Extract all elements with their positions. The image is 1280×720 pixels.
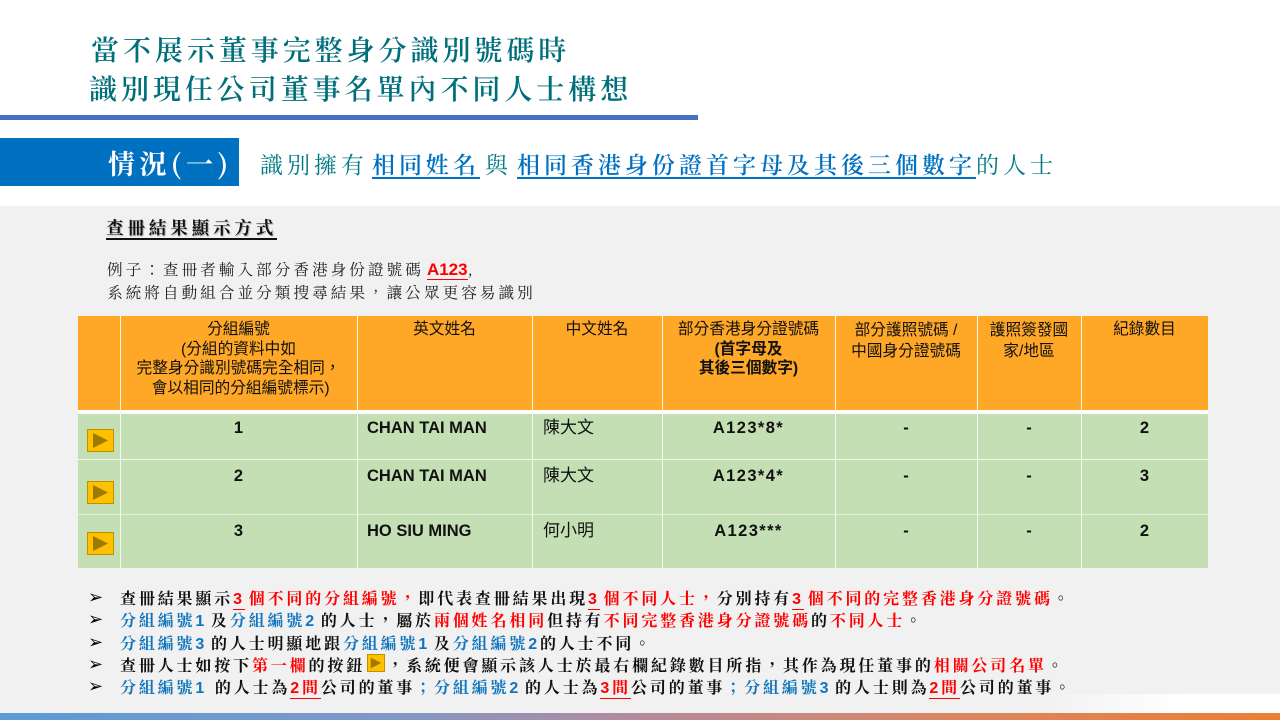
finding 1: 3 bbox=[588, 591, 600, 608]
finding 1: 查冊結果顯示 個不同的分組編號，即代表查冊結果出現 個不同人士，分別持有 個不同的完整香港身分證號碼。 bbox=[120, 586, 1072, 609]
column heading: passport issuing place: 家/地區 bbox=[1003, 343, 1055, 360]
column heading: English name: 英文姓名 bbox=[413, 321, 476, 338]
table row 3: HO SIU MING bbox=[367, 522, 472, 540]
table row 2: - bbox=[903, 467, 909, 485]
finding 5: 2間 bbox=[290, 675, 321, 698]
finding 1: 3 bbox=[792, 591, 804, 608]
finding 4: 查冊人士如按下第一欄的按鈕 ，系統便會顯示該人士於最右欄紀錄數目所指，其作為現任董事的相關公司名單。 bbox=[120, 653, 1066, 676]
column heading: group number: 分組編號 bbox=[207, 321, 270, 338]
column heading: partial passport: 部分護照號碼 / bbox=[855, 322, 957, 339]
section label: scenario one bbox=[0, 138, 239, 186]
table row 2: A123*4* bbox=[713, 467, 784, 485]
column heading: Chinese name: 中文姓名 bbox=[566, 321, 628, 338]
finding 3: 分組編號3 的人士明顯地跟分組編號1 及分組編號2的人士不同。 bbox=[120, 631, 653, 654]
column heading: partial HKID: 其後三個數字) bbox=[699, 360, 798, 377]
finding 3: ➢ bbox=[88, 632, 103, 653]
table row 1: - bbox=[1026, 419, 1032, 437]
row 1 button icon bbox=[87, 429, 114, 452]
finding 2: ➢ bbox=[88, 609, 103, 630]
section subheading: 相同姓名 bbox=[372, 147, 480, 180]
finding 2: 分組編號1 及分組編號2 的人士，屬於兩個姓名相同但持有不同完整香港身分證號碼的不同人士。 bbox=[120, 608, 924, 631]
column heading: group number: 完整身分識別號碼完全相同， bbox=[137, 360, 340, 377]
column heading: partial passport: 中國身分證號碼 bbox=[851, 343, 961, 360]
table header row bbox=[78, 316, 1208, 410]
column heading: partial passport bbox=[851, 321, 961, 360]
finding 1: 3 bbox=[233, 591, 245, 608]
example text bbox=[107, 258, 536, 303]
table row 2: CHAN TAI MAN bbox=[367, 467, 487, 485]
table row 3: 2 bbox=[1140, 522, 1149, 540]
row 3 button icon bbox=[87, 532, 114, 555]
table row 1: CHAN TAI MAN bbox=[367, 419, 487, 437]
section subheading: 識別擁有 與 的人士 bbox=[260, 147, 1057, 180]
row 2 button icon bbox=[87, 481, 114, 504]
table row 3: A123*** bbox=[714, 522, 783, 540]
white separator band bbox=[78, 410, 1208, 414]
column heading: record count: 紀錄數目 bbox=[1113, 321, 1176, 338]
table row 1: 2 bbox=[1140, 419, 1149, 437]
table row 2: 2 bbox=[234, 467, 243, 485]
column heading: group number: (分組的資料中如 bbox=[181, 340, 296, 358]
fade patch lower right bbox=[1040, 694, 1280, 713]
table row 1 bbox=[78, 414, 1208, 459]
footer gradient bar bbox=[0, 713, 1280, 720]
example text: 系統將自動組合並分類搜尋結果，讓公眾更容易識別 bbox=[107, 281, 536, 303]
example text: 例子：查冊者輸入部分香港身份證號碼 , bbox=[107, 258, 476, 280]
column heading: partial HKID: (首字母及 bbox=[714, 340, 782, 358]
results table bbox=[78, 316, 1208, 568]
finding 1: ➢ bbox=[88, 587, 103, 608]
panel heading: 查冊結果顯示方式 bbox=[106, 215, 277, 240]
title: 識別現任公司董事名單內不同人士構想 bbox=[89, 68, 632, 108]
table row 2: - bbox=[1026, 467, 1032, 485]
column heading: passport issuing place: 護照簽發國 bbox=[990, 322, 1068, 339]
finding 5: ➢ bbox=[88, 676, 103, 697]
column heading: passport issuing place bbox=[990, 321, 1068, 360]
column heading: partial HKID bbox=[678, 320, 819, 377]
table row 2: 3 bbox=[1140, 467, 1149, 485]
example text: A123 bbox=[427, 260, 468, 279]
section label: scenario one: 情況(一) bbox=[108, 143, 233, 182]
title: 當不展示董事完整身分識別號碼時 bbox=[91, 29, 570, 69]
column heading: group number bbox=[137, 320, 340, 396]
table row 3: - bbox=[1026, 522, 1032, 540]
column heading: group number: 會以相同的分組編號標示) bbox=[152, 380, 330, 396]
title underline bar bbox=[0, 115, 698, 120]
table row 2: 陳大文 bbox=[543, 466, 594, 485]
inline button icon bbox=[367, 654, 385, 672]
finding 5: 3間 bbox=[600, 675, 631, 698]
table row 1: - bbox=[903, 419, 909, 437]
grey content panel bbox=[0, 206, 1280, 713]
table row 3: - bbox=[903, 522, 909, 540]
table row 3 bbox=[78, 515, 1208, 568]
section subheading: 相同香港身份證首字母及其後三個數字 bbox=[517, 147, 976, 180]
finding 4: ➢ bbox=[88, 654, 103, 675]
table row 1: 1 bbox=[234, 419, 243, 437]
table row 3: 何小明 bbox=[543, 521, 594, 540]
title bbox=[89, 29, 632, 108]
finding 5: 2間 bbox=[929, 675, 960, 698]
table row 1: A123*8* bbox=[713, 419, 784, 437]
table row 2 bbox=[78, 460, 1208, 514]
findings list bbox=[88, 586, 1073, 699]
column heading: partial HKID: 部分香港身分證號碼 bbox=[678, 321, 819, 338]
finding 5: 分組編號1 的人士為 公司的董事；分組編號2 的人士為 公司的董事；分組編號3 的人士則為 公司的董事。 bbox=[120, 675, 1073, 698]
table row 1: 陳大文 bbox=[543, 418, 594, 437]
table row 3: 3 bbox=[234, 522, 243, 540]
